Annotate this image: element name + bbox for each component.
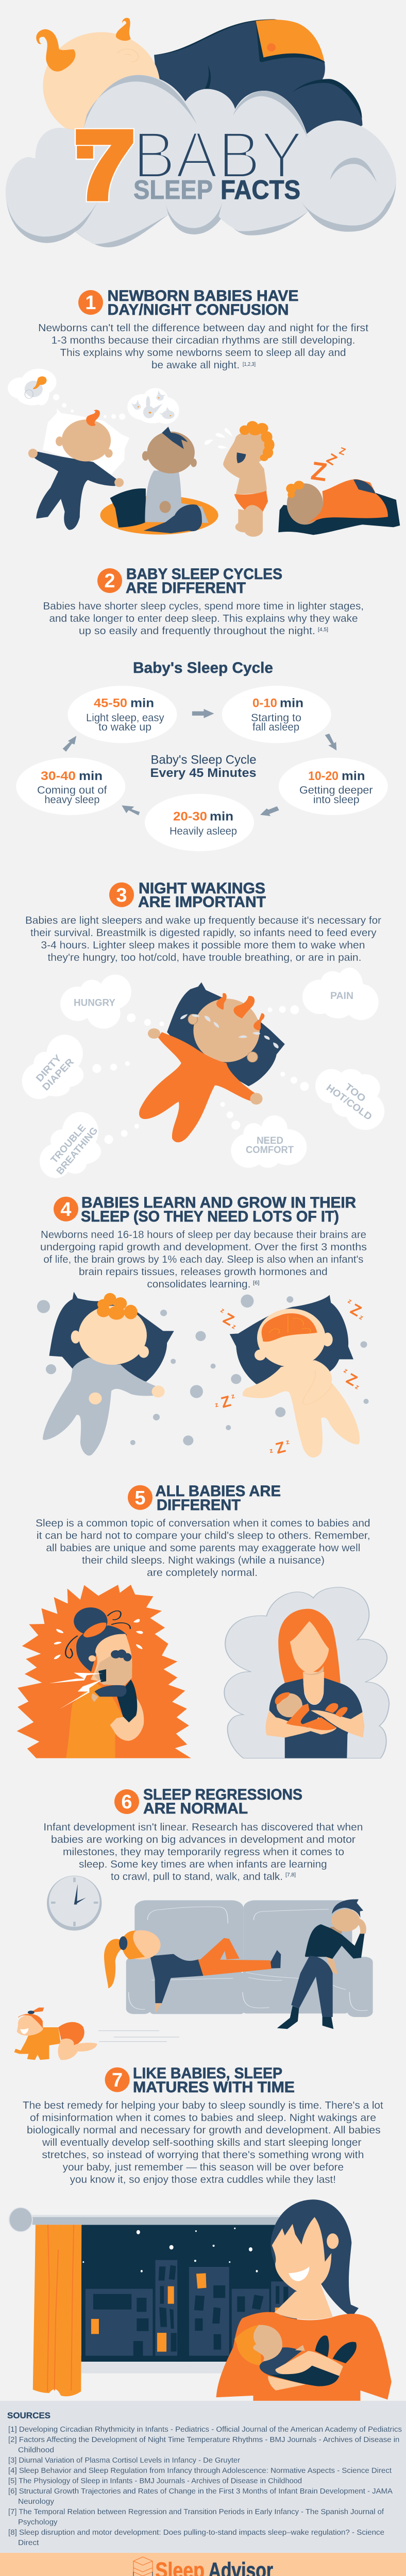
baby head bbox=[43, 32, 160, 140]
fact 4 heading: SLEEP (SO THEY NEED LOTS OF IT) bbox=[81, 1208, 339, 1225]
fact 4 heading: BABIES LEARN AND GROW IN THEIR bbox=[81, 1194, 356, 1211]
fact 7 text: of misinformation when it comes to babies and sleep. Night wakings are bbox=[30, 2112, 376, 2124]
logo icon bbox=[133, 2557, 153, 2576]
stage: 30-40 min: heavy sleep bbox=[44, 794, 99, 806]
number badge 2 bbox=[97, 568, 122, 593]
zzz marks: z bbox=[230, 1392, 236, 1400]
number badge 3: 3 bbox=[116, 885, 127, 906]
fact 5 text: it can be hard not to compare your child's sleep to others. Remember, bbox=[37, 1530, 370, 1541]
stage: 30-40 min: min bbox=[79, 769, 103, 783]
fact 1 heading: DAY/NIGHT CONFUSION bbox=[107, 301, 289, 318]
cloud labels: DIAPER bbox=[40, 1057, 76, 1093]
fact 3 text bbox=[25, 915, 381, 963]
sources heading: SOURCES bbox=[7, 2411, 50, 2420]
source list bbox=[8, 2425, 402, 2547]
stage: 10-20 min bbox=[279, 758, 388, 815]
title bbox=[74, 111, 303, 220]
stage: 45-50 min: 45-50 bbox=[94, 697, 127, 710]
stage: 10-20 min: 10-20 bbox=[308, 769, 339, 783]
fact 4 text: brain repairs tissues, releases growth hormones and bbox=[79, 1266, 328, 1278]
cloud bbox=[6, 75, 396, 244]
mother lying down bbox=[104, 1930, 281, 2013]
fact 2 text: Babies have shorter sleep cycles, spend more time in lighter stages, bbox=[43, 601, 364, 612]
stage: 0-10 min: 0-10 bbox=[252, 697, 277, 710]
baby body bbox=[154, 19, 363, 155]
fact 1 illustration: four babies bbox=[8, 369, 400, 537]
number badge 7: 7 bbox=[112, 2070, 123, 2091]
city buildings bbox=[86, 2260, 297, 2356]
number badge 1: 1 bbox=[85, 292, 96, 314]
source list: Childhood bbox=[18, 2446, 54, 2454]
fact 6 heading: SLEEP REGRESSIONS bbox=[143, 1786, 302, 1803]
fact 1 heading: NEWBORN BABIES HAVE bbox=[107, 287, 299, 304]
lit windows bbox=[91, 2273, 282, 2352]
centre caption: Baby's Sleep Cycle bbox=[150, 753, 257, 767]
fact 6 text: sleep. Some key times are when infants are learning bbox=[79, 1859, 327, 1870]
fact 1 text: Newborns can't tell the difference between day and night for the first bbox=[38, 323, 368, 334]
fact 4 text: of life, the brain grows by 1% each day. Sleep is also when an infant's bbox=[43, 1254, 363, 1265]
diaper bbox=[256, 20, 325, 61]
fact 5 heading bbox=[128, 1483, 281, 1514]
zzz marks: Z bbox=[219, 1393, 233, 1412]
fact 3 text: 3-4 hours. Lighter sleep makes it possible more them to wake when bbox=[41, 940, 365, 951]
fact 7 text: your baby, just remember — this season will be over before bbox=[63, 2162, 344, 2173]
logo wordmark bbox=[156, 2558, 273, 2576]
stage: 20-30 min: min bbox=[210, 810, 233, 824]
fact 7 heading bbox=[105, 2065, 295, 2096]
fact 2 text: and take longer to enter deep sleep. This explains why they wake bbox=[49, 613, 358, 624]
fact 7 text: biologically normal and necessary for growth and development. All babies bbox=[27, 2125, 381, 2136]
stage: 45-50 min: to wake up bbox=[98, 721, 151, 733]
fact 6 text: babies are working on big advances in development and motor bbox=[51, 1834, 356, 1845]
baby body shading bbox=[154, 19, 362, 118]
fact 3 heading bbox=[109, 880, 266, 911]
fact 4 text: consolidates learning. bbox=[147, 1279, 250, 1290]
sleeping baby in grey suit bbox=[43, 1292, 174, 1455]
hero illustration: baby sleeping on a cloud bbox=[6, 18, 396, 247]
fact 4 text bbox=[40, 1229, 367, 1290]
source list: [7] The Temporal Relation between Regression and Transition Periods in Early Infancy - The Spanish Journal of bbox=[8, 2507, 384, 2516]
footer logo band bbox=[0, 2553, 406, 2576]
word facts: FACTS bbox=[221, 175, 300, 205]
stage: 30-40 min bbox=[16, 758, 125, 815]
sofa bbox=[126, 1900, 373, 2017]
cloud labels: NEED bbox=[257, 1136, 283, 1146]
stage: 0-10 min bbox=[222, 686, 331, 743]
number badge 2: 2 bbox=[104, 570, 115, 592]
word sleep: SLEEP bbox=[133, 175, 213, 205]
zzz marks: Z bbox=[343, 1370, 360, 1389]
source list: [1] Developing Circadian Rhythmicity in Infants - Pediatrics - Official Journal of the American Academy of Pediatrics bbox=[8, 2425, 402, 2434]
stage: 30-40 min: 30-40 bbox=[41, 769, 76, 783]
fact 4 text: undergoing rapid growth and development. Over the first 3 months bbox=[40, 1242, 367, 1253]
thought cloud: bunnies bbox=[104, 388, 179, 424]
number badge 7 bbox=[105, 2067, 130, 2092]
fact 5 illustration: stressed parent and calm parent bbox=[17, 1585, 389, 1758]
fact 3 text: Babies are light sleepers and wake up frequently because it's necessary for bbox=[25, 915, 381, 926]
zzz marks: z bbox=[354, 1383, 361, 1391]
fact 6 text: to crawl, pull to stand, walk, and talk. bbox=[111, 1871, 283, 1883]
mother bbox=[216, 2199, 392, 2401]
orange curtain bbox=[33, 2225, 81, 2396]
fact 3 text: their survival. Breastmilk is digested rapidly, so infants need to feed every bbox=[30, 927, 377, 939]
cloud labels: BREATHING bbox=[55, 1125, 100, 1177]
fact 7 illustration: mother at night window bbox=[9, 2199, 392, 2401]
cloud labels: HUNGRY bbox=[74, 998, 115, 1009]
cycle arrows bbox=[63, 709, 336, 816]
cloud rim shading bbox=[83, 75, 377, 182]
stage: 0-10 min: Starting to bbox=[251, 712, 301, 724]
stage: 45-50 min: Light sleep, easy bbox=[86, 712, 164, 724]
wall clock bbox=[47, 1876, 102, 1930]
centre caption bbox=[150, 753, 257, 780]
stage: 10-20 min: min bbox=[342, 769, 365, 783]
zzz marks: Z bbox=[220, 1310, 237, 1329]
number badge 5 bbox=[128, 1485, 153, 1510]
stage: 0-10 min: fall asleep bbox=[252, 721, 299, 733]
zzz marks: z bbox=[268, 1446, 274, 1454]
numeral seven: 7 bbox=[74, 111, 136, 220]
cloud labels: TOO bbox=[343, 1081, 367, 1105]
source list: [2] Factors Affecting the Development of Night Time Temperature Rhythms - BMJ Journals - Archives of Disease in bbox=[8, 2435, 399, 2444]
calm parent on cloud bbox=[224, 1587, 389, 1758]
fact 5 text: Sleep is a common topic of conversation when it comes to babies and bbox=[36, 1518, 370, 1529]
zzz marks: z bbox=[219, 1306, 226, 1315]
sleeping z letters bbox=[309, 446, 347, 487]
numeral seven: 7 bbox=[74, 111, 136, 220]
zzz marks: z bbox=[358, 1313, 365, 1321]
crying baby bbox=[139, 982, 285, 1142]
cloud labels: HOT/COLD bbox=[324, 1082, 374, 1123]
sources panel bbox=[0, 2401, 406, 2553]
fact 1 text: [1,2,3] bbox=[243, 362, 256, 367]
fact 5 text: all babies are unique and some parents may exaggerate how well bbox=[46, 1543, 360, 1554]
fact 5 heading: ALL BABIES ARE bbox=[156, 1483, 281, 1500]
fact 6 illustration: tired parents, clock, crawling baby bbox=[14, 1876, 373, 2060]
fact 6 text: [7,8] bbox=[285, 1872, 296, 1878]
baby in arms bbox=[234, 2325, 357, 2391]
baby one on pillow bbox=[28, 409, 129, 530]
zzz marks bbox=[213, 1297, 369, 1459]
fact 4 text: Newborns need 16-18 hours of sleep per day because their brains are bbox=[41, 1229, 366, 1241]
source list: Direct bbox=[18, 2538, 39, 2547]
source list: [4] Sleep Behavior and Sleep Regulation from Infancy through Adolescence: Normative Aspects - Science Direct bbox=[8, 2466, 392, 2475]
zzz marks: z bbox=[285, 1437, 291, 1446]
fact 2 heading: BABY SLEEP CYCLES bbox=[126, 566, 282, 583]
zzz marks: z bbox=[346, 1297, 353, 1306]
fact 2 text: up so easily and frequently throughout the night. bbox=[79, 625, 315, 637]
cloud labels: TROUBLE bbox=[49, 1123, 88, 1165]
fact 6 text bbox=[43, 1822, 363, 1883]
cloud shadow bbox=[6, 75, 396, 247]
sleeping z letters: Z bbox=[324, 450, 340, 468]
drifting dots bbox=[37, 1295, 369, 1446]
baby three crying bbox=[205, 421, 275, 537]
diagram title: Baby's Sleep Cycle bbox=[133, 659, 273, 676]
source list: Neurology bbox=[18, 2497, 55, 2506]
source list: Psychology bbox=[18, 2518, 58, 2527]
fact 7 text: will eventually develop self-soothing skills and start sleeping longer bbox=[42, 2137, 362, 2148]
baby four sleeping bbox=[278, 479, 400, 535]
hair curls bbox=[36, 18, 131, 72]
source list: [6] Structural Growth Trajectories and Rates of Change in the First 3 Months of Infant Brain Development - JAMA bbox=[8, 2487, 393, 2496]
number badge 6: 6 bbox=[121, 1791, 132, 1813]
fact 1 text: be awake all night. bbox=[151, 360, 240, 371]
stage: 20-30 min: 20-30 bbox=[173, 810, 207, 824]
sleeping baby showing brain bbox=[230, 1295, 360, 1458]
fact 3 text: they're hungry, too hot/cold, have trouble breathing, or are in pain. bbox=[47, 952, 362, 963]
stage: 10-20 min: into sleep bbox=[313, 794, 360, 806]
zzz marks: z bbox=[342, 1366, 349, 1375]
fact 6 heading bbox=[114, 1786, 302, 1817]
source list: [3] Diurnal Variation of Plasma Cortisol Levels in Infancy - De Gruyter bbox=[8, 2456, 240, 2465]
baby two sitting on rug bbox=[100, 427, 218, 535]
curtain rod bbox=[9, 2208, 285, 2232]
thought cloud: pacifier bbox=[8, 369, 74, 413]
zzz marks: Z bbox=[274, 1438, 287, 1458]
cloud labels: PAIN bbox=[330, 991, 353, 1002]
fact 7 heading: LIKE BABIES, SLEEP bbox=[133, 2065, 282, 2082]
number badge 1 bbox=[78, 290, 103, 315]
stage: 45-50 min: min bbox=[130, 697, 154, 710]
fact 7 heading: MATURES WITH TIME bbox=[133, 2079, 295, 2096]
stage: 20-30 min bbox=[145, 794, 254, 851]
zzz marks: Z bbox=[347, 1301, 364, 1320]
source list: [5] The Physiology of Sleep in Infants - BMJ Journals - Archives of Disease in Childhood bbox=[8, 2477, 302, 2485]
cloud labels: DIRTY bbox=[34, 1053, 64, 1084]
fact 2 heading bbox=[97, 566, 282, 597]
fact 1 heading bbox=[78, 287, 299, 318]
fact 4 heading bbox=[54, 1194, 356, 1225]
cloud labels: COMFORT bbox=[246, 1145, 294, 1156]
fact 5 heading: DIFFERENT bbox=[157, 1497, 241, 1514]
crawling baby bbox=[14, 2008, 179, 2060]
fact 7 text: you know it, so enjoy those extra cuddles while they last! bbox=[70, 2174, 336, 2185]
stage: 30-40 min: Coming out of bbox=[37, 785, 107, 796]
stage: 45-50 min bbox=[67, 686, 177, 743]
stars bbox=[82, 2228, 258, 2273]
thought clouds bbox=[22, 968, 384, 1178]
fact 2 heading: ARE DIFFERENT bbox=[126, 580, 246, 597]
building windows bbox=[81, 2265, 288, 2362]
number badge 5: 5 bbox=[134, 1487, 146, 1509]
fact 4 text: [6] bbox=[253, 1280, 260, 1286]
window night sky bbox=[81, 2225, 286, 2362]
stressed parent on orange burst bbox=[17, 1585, 191, 1758]
stage: 10-20 min: Getting deeper bbox=[299, 785, 373, 796]
fact 6 heading: ARE NORMAL bbox=[143, 1800, 248, 1817]
zzz marks: z bbox=[231, 1322, 238, 1331]
fact 5 text: are completely normal. bbox=[147, 1567, 258, 1579]
centre caption: Every 45 Minutes bbox=[150, 766, 257, 780]
fact 7 text: The best remedy for helping your baby to sleep soundly is time. There's a lot bbox=[23, 2100, 383, 2111]
number badge 4 bbox=[54, 1197, 78, 1222]
sleeping z letters: Z bbox=[309, 456, 329, 487]
source list: [8] Sleep disruption and motor development: Does pulling-to-stand impacts sleep–wake regulation? - Science bbox=[8, 2528, 384, 2537]
fact 1 text bbox=[38, 323, 368, 371]
fact 3 heading: NIGHT WAKINGS bbox=[139, 880, 265, 897]
fact 1 text: This explains why some newborns seem to sleep all day and bbox=[60, 347, 346, 359]
fact 4 illustration: sleeping babies and brain bbox=[37, 1292, 369, 1459]
sleep cycle diagram bbox=[16, 659, 388, 851]
zzz marks: z bbox=[214, 1400, 219, 1409]
fact 7 text: stretches, so instead of worrying that there's something wrong with bbox=[42, 2149, 364, 2161]
number badge 4: 4 bbox=[60, 1199, 72, 1221]
fact 6 text: Infant development isn't linear. Research has discovered that when bbox=[43, 1822, 363, 1833]
number badge 3 bbox=[109, 883, 134, 907]
number badge 6 bbox=[114, 1789, 139, 1814]
fact 7 text bbox=[23, 2100, 383, 2185]
word baby: BABY bbox=[133, 118, 303, 192]
sleeping z letters: Z bbox=[337, 446, 347, 458]
stage: 20-30 min: Heavily asleep bbox=[170, 825, 237, 837]
cloud labels bbox=[34, 991, 374, 1177]
fact 1 text: 1-3 months because their circadian rhythms are still developing. bbox=[52, 335, 356, 346]
stage: 0-10 min: min bbox=[280, 697, 303, 710]
fact 2 text: [4,5] bbox=[318, 627, 328, 633]
fact 5 text: their child sleeps. Night wakings (while a nuisance) bbox=[82, 1555, 325, 1566]
fact 5 text bbox=[36, 1518, 370, 1579]
father sitting bbox=[277, 1899, 366, 2029]
fact 3 heading: ARE IMPORTANT bbox=[138, 894, 266, 911]
fact 6 text: milestones, they may temporarily regress when it comes to bbox=[63, 1846, 344, 1858]
window sill bbox=[81, 2362, 236, 2374]
fact 3 illustration: crying baby with reason clouds bbox=[22, 968, 384, 1178]
fact 2 text bbox=[43, 601, 364, 637]
